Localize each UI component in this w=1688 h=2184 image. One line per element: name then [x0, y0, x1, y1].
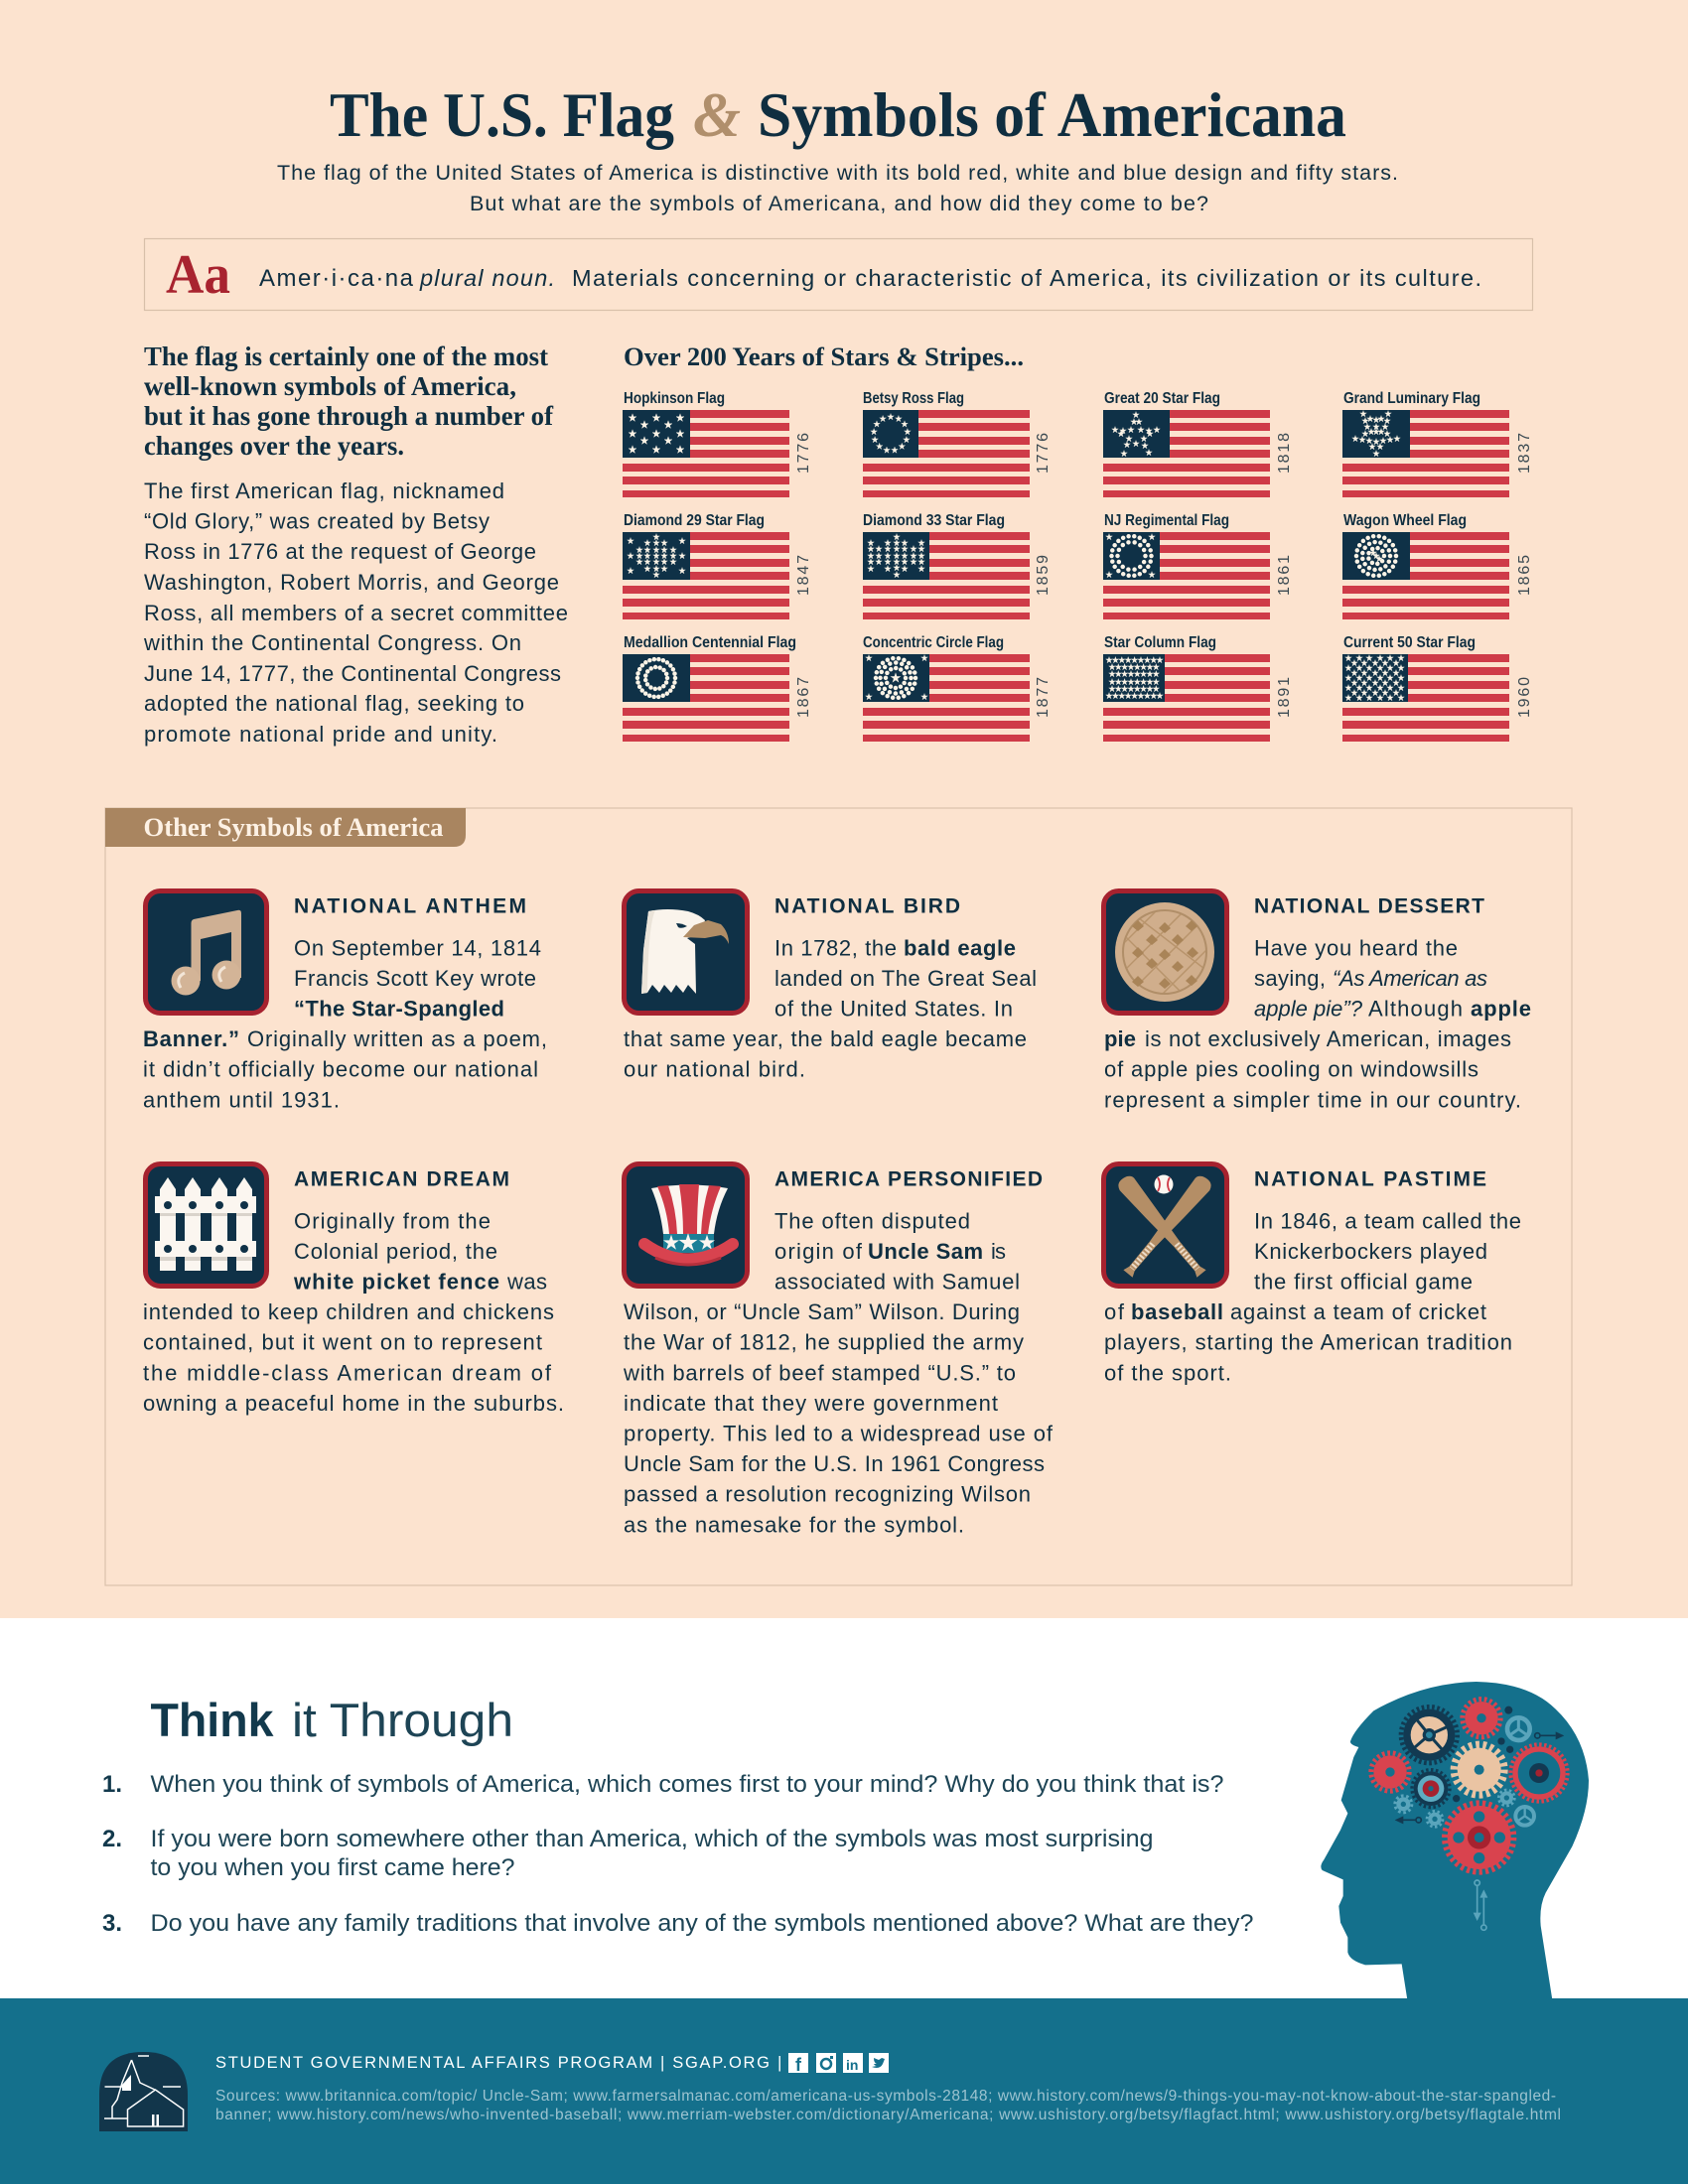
national pastime text: players, starting the American tradition: [1104, 1330, 1512, 1355]
flag: Concentric Circle 1877: Concentric Circle Flag: [863, 634, 1004, 651]
america personified text: origin of: [774, 1239, 863, 1264]
flag: Betsy Ross 1776: [863, 390, 1052, 497]
america personified text: Wilson, or “Uncle Sam” Wilson. During: [624, 1299, 1020, 1324]
flag: NJ Regimental 1861: [1103, 512, 1293, 619]
national bird text: landed on The Great Seal: [774, 966, 1037, 991]
tan gear: [1454, 1744, 1504, 1795]
question 1: 1.: [102, 1771, 122, 1798]
question 2: If you were born somewhere other than America, which of the symbols was most surprising: [151, 1826, 1154, 1852]
icon: linkedin: in: [846, 2057, 858, 2073]
flag: NJ Regimental 1861: 1861: [1276, 555, 1293, 596]
national pastime text: In 1846, a team called the: [1254, 1208, 1521, 1233]
footer sources: [215, 2088, 1561, 2123]
american dream text: Originally from the: [294, 1208, 491, 1233]
flag: Diamond 33 Star 1859: 1859: [1035, 555, 1052, 596]
american dream text: was: [506, 1269, 547, 1294]
left column body text: adopted the national flag, seeking to: [144, 691, 524, 716]
american dream text: AMERICAN DREAM: [294, 1167, 509, 1190]
america personified text: is: [991, 1239, 1006, 1264]
national dessert text: Although: [1368, 996, 1463, 1021]
national pastime text: [1104, 1167, 1521, 1385]
small navy gear: [1412, 1770, 1450, 1808]
national dessert text: pie: [1104, 1026, 1136, 1051]
national anthem text: NATIONAL ANTHEM: [294, 894, 526, 917]
left column body text: Washington, Robert Morris, and George: [144, 570, 559, 595]
section tab: [105, 808, 466, 847]
icon: instagram: [816, 2053, 836, 2073]
american dream text: white picket fence: [293, 1269, 499, 1294]
icon: twitter: [869, 2053, 889, 2073]
america personified text: associated with Samuel: [774, 1269, 1020, 1294]
national bird text: our national bird.: [624, 1057, 805, 1082]
title: Symbols of Americana: [758, 79, 1346, 150]
national bird text: In 1782, the: [774, 935, 897, 960]
flag: Diamond 29 Star 1847: 1847: [795, 555, 812, 596]
small arrows: [1395, 1731, 1564, 1930]
america personified text: [623, 1167, 1054, 1537]
flag: Diamond 33 Star 1859: [863, 512, 1052, 619]
left column body text: “Old Glory,” was created by Betsy: [144, 508, 490, 534]
footer sources: banner; www.history.com/news/who-invented-baseball; www.merriam-webster.com/dictionary/Americana; www.ushistory.org/betsy/flagfact.html; www.ushistory.org/betsy/flagtale.html: [215, 2107, 1561, 2123]
flag: Wagon Wheel 1865: Wagon Wheel Flag: [1343, 512, 1467, 529]
red gear bottom: [1445, 1803, 1513, 1872]
icon: white picket fence: [145, 1163, 266, 1287]
flag: Grand Luminary 1837: [1342, 390, 1533, 497]
left column body text: promote national pride and unity.: [144, 722, 497, 747]
america personified text: Uncle Sam: [868, 1239, 983, 1264]
navy dots: [1453, 1706, 1513, 1802]
national pastime text: the first official game: [1254, 1269, 1473, 1294]
national bird text: that same year, the bald eagle became: [624, 1026, 1027, 1051]
flag: Medallion Centennial 1867: 1867: [795, 677, 812, 718]
national anthem text: Francis Scott Key wrote: [294, 966, 536, 991]
think it through heading: it Through: [292, 1694, 513, 1746]
national pastime text: of: [1104, 1299, 1125, 1324]
america personified text: AMERICA PERSONIFIED: [774, 1167, 1043, 1190]
national pastime text: NATIONAL PASTIME: [1254, 1167, 1486, 1190]
icon: facebook: [788, 2053, 808, 2075]
flag: Betsy Ross 1776: Betsy Ross Flag: [863, 390, 964, 407]
america personified text: indicate that they were government: [624, 1391, 998, 1416]
flag: Great 20 Star 1818: 1818: [1276, 433, 1293, 474]
national dessert text: NATIONAL DESSERT: [1254, 894, 1484, 917]
question 1: When you think of symbols of America, which comes first to your mind? Why do you think that is?: [151, 1771, 1223, 1798]
definition box: [145, 238, 1533, 310]
footer band: [0, 1998, 1688, 2184]
national dessert text: represent a simpler time in our country.: [1104, 1087, 1521, 1112]
left column body text: June 14, 1777, the Continental Congress: [144, 661, 561, 686]
flag: Grand Luminary 1837: 1837: [1516, 433, 1533, 474]
icon: linkedin: [843, 2053, 863, 2073]
footer program line: STUDENT GOVERNMENTAL AFFAIRS PROGRAM | SGAP.ORG: [215, 2054, 770, 2072]
subtitle: But what are the symbols of Americana, and how did they come to be?: [470, 192, 1208, 215]
america personified text: the War of 1812, he supplied the army: [624, 1330, 1024, 1355]
america personified text: with barrels of beef stamped “U.S.” to: [623, 1360, 1016, 1385]
flag: Wagon Wheel 1865: [1342, 512, 1533, 619]
flag: NJ Regimental 1861: NJ Regimental Flag: [1104, 512, 1229, 529]
left column intro heading: The flag is certainly one of the most: [144, 341, 548, 371]
national dessert text: “As American as: [1333, 966, 1487, 991]
flag: Concentric Circle 1877: [863, 634, 1052, 742]
red gear left: [1371, 1753, 1409, 1791]
definition box: plural noun.: [419, 265, 555, 291]
flag: Concentric Circle 1877: 1877: [1035, 677, 1052, 718]
flag: Great 20 Star 1818: Great 20 Star Flag: [1104, 390, 1220, 407]
panel: other symbols of America: [105, 808, 1572, 1585]
peach background: [0, 0, 1688, 1618]
america personified text: The often disputed: [774, 1208, 970, 1233]
title: The U.S. Flag: [330, 79, 674, 150]
american dream text: [143, 1167, 564, 1416]
icon: apple pie: [1104, 891, 1227, 1013]
flag: Current 50 Star 1960: Current 50 Star Flag: [1343, 634, 1476, 651]
national pastime text: Knickerbockers played: [1254, 1239, 1487, 1264]
subtitle: [277, 161, 1398, 215]
question 2: 2.: [102, 1826, 122, 1852]
left column intro heading: changes over the years.: [144, 431, 404, 461]
left column body text: within the Continental Congress. On: [143, 630, 521, 655]
national dessert text: apple: [1471, 996, 1531, 1021]
question 2: [102, 1826, 1154, 1881]
america personified text: Uncle Sam for the U.S. In 1961 Congress: [624, 1451, 1045, 1476]
footer separator: |: [777, 2053, 781, 2072]
white section background: [0, 1618, 1688, 1998]
national pastime text: baseball: [1131, 1299, 1223, 1324]
navy gear: [1401, 1706, 1458, 1763]
section tab: Other Symbols of America: [143, 813, 443, 842]
flag: Grand Luminary 1837: Grand Luminary Flag: [1343, 390, 1480, 407]
national pastime text: of the sport.: [1104, 1360, 1231, 1385]
flag: Star Column 1891: [1103, 634, 1293, 742]
left column body text: Ross in 1776 at the request of George: [144, 539, 536, 564]
national anthem text: On September 14, 1814: [294, 935, 541, 960]
national anthem text: “The Star-Spangled: [294, 996, 504, 1021]
flag: Betsy Ross 1776: 1776: [1035, 433, 1052, 474]
america personified text: as the namesake for the symbol.: [624, 1512, 964, 1537]
national bird text: NATIONAL BIRD: [774, 894, 960, 917]
left column body text: Ross, all members of a secret committee: [144, 601, 568, 625]
flag: Current 50 Star 1960: 1960: [1516, 677, 1533, 718]
american dream text: the middle-class American dream of: [143, 1360, 552, 1385]
flag: Hopkinson 1776: [623, 390, 812, 497]
icon: Uncle Sam hat: [624, 1163, 747, 1287]
blue wheels: [1507, 1717, 1534, 1826]
small blue gears: [1395, 1790, 1514, 1827]
national bird text: of the United States. In: [774, 996, 1013, 1021]
american dream text: contained, but it went on to represent: [143, 1330, 542, 1355]
national dessert text: is not exclusively American, images: [1145, 1026, 1511, 1051]
red gear top: [1463, 1699, 1500, 1737]
national anthem text: [143, 894, 547, 1112]
national pastime text: against a team of cricket: [1230, 1299, 1486, 1324]
question 3: 3.: [102, 1910, 122, 1937]
definition box: Aa: [166, 244, 230, 306]
question 3: Do you have any family traditions that involve any of the symbols mentioned above? What are they?: [151, 1910, 1253, 1937]
question 2: to you when you first came here?: [151, 1854, 514, 1881]
flag: Great 20 Star 1818: [1103, 390, 1293, 497]
flag: Star Column 1891: 1891: [1276, 677, 1293, 718]
left column intro heading: well-known symbols of America,: [144, 371, 516, 401]
red gear right: [1510, 1744, 1568, 1802]
subtitle: The flag of the United States of America is distinctive with its bold red, white and blue design and fifty stars.: [277, 161, 1398, 185]
definition box: Materials concerning or characteristic of America, its civilization or its culture.: [572, 265, 1481, 291]
footer sources: Sources: www.britannica.com/topic/ Uncle-Sam; www.farmersalmanac.com/americana-us-symbols-28148; www.history.com/news/9-things-you-may-not-know-about-the-star-spangled-: [215, 2088, 1556, 2105]
flag: Current 50 Star 1960: [1342, 634, 1533, 742]
icon: head with gears: [1321, 1682, 1589, 1999]
icon: music note: [145, 891, 266, 1013]
national dessert text: saying,: [1254, 966, 1326, 991]
national anthem text: Banner.”: [143, 1026, 239, 1051]
america personified text: passed a resolution recognizing Wilson: [624, 1482, 1031, 1507]
icon: crossed baseball bats: [1104, 1163, 1227, 1287]
flag: Star Column 1891: Star Column Flag: [1104, 634, 1216, 651]
icon: bald eagle: [624, 891, 747, 1013]
logo: SGAP building: [99, 2052, 188, 2131]
flag: Medallion Centennial 1867: Medallion Centennial Flag: [624, 634, 796, 651]
american dream text: owning a peaceful home in the suburbs.: [143, 1391, 564, 1416]
american dream text: intended to keep children and chickens: [143, 1299, 554, 1324]
american dream text: Colonial period, the: [294, 1239, 497, 1264]
think it through heading: [151, 1694, 513, 1746]
national anthem text: it didn’t officially become our national: [143, 1057, 538, 1082]
definition box: Amer·i·ca·na: [259, 265, 414, 292]
flag: Hopkinson 1776: Hopkinson Flag: [624, 390, 725, 407]
left column intro heading: [144, 341, 554, 461]
flag: Medallion Centennial 1867: [623, 634, 812, 742]
left column body text: The first American flag, nicknamed: [144, 478, 504, 503]
flag: Diamond 29 Star 1847: [623, 512, 812, 619]
flag: Diamond 29 Star 1847: Diamond 29 Star Flag: [624, 512, 765, 529]
title: &: [693, 79, 741, 150]
national dessert text: apple pie”?: [1254, 996, 1363, 1021]
title: [330, 79, 1346, 150]
national bird text: bald eagle: [904, 935, 1016, 960]
national dessert text: Have you heard the: [1254, 935, 1458, 960]
icon: facebook: f: [795, 2055, 802, 2075]
national bird text: [624, 894, 1037, 1082]
think it through heading: Think: [151, 1694, 274, 1746]
flag: Hopkinson 1776: 1776: [795, 433, 812, 474]
flags heading: Over 200 Years of Stars & Stripes...: [624, 342, 1024, 371]
national dessert text: of apple pies cooling on windowsills: [1104, 1057, 1478, 1082]
national dessert text: [1104, 894, 1531, 1112]
left column body text: [143, 478, 568, 747]
flag: Wagon Wheel 1865: 1865: [1516, 555, 1533, 596]
america personified text: property. This led to a widespread use of: [624, 1421, 1054, 1445]
national anthem text: Originally written as a poem,: [247, 1026, 547, 1051]
national anthem text: anthem until 1931.: [143, 1087, 340, 1112]
left column intro heading: but it has gone through a number of: [144, 401, 554, 431]
flag: Diamond 33 Star 1859: Diamond 33 Star Flag: [863, 512, 1005, 529]
